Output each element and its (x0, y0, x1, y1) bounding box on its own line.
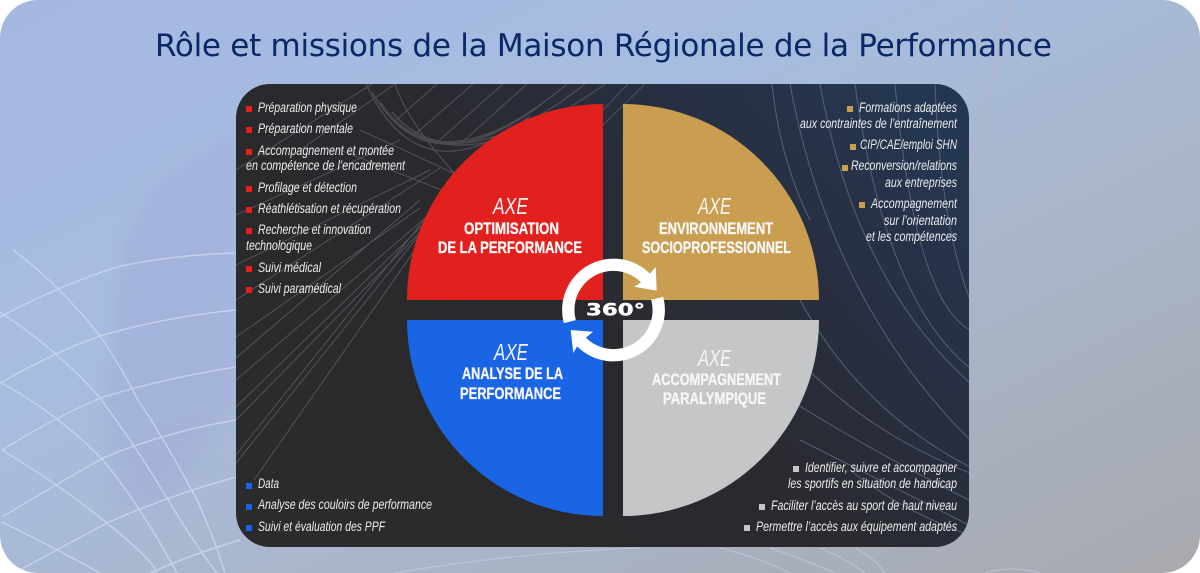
quadrant: optimisation de la performance: DE LA PERFORMANCE (438, 239, 582, 257)
dark central panel (236, 84, 970, 547)
list: optimisation de la performance: Accompagnement et montée (257, 143, 394, 158)
list: accompagnement paralympique: Permettre l’accès aux équipement adaptés (756, 519, 957, 534)
list: accompagnement paralympique: Identifier, suivre et accompagner (805, 460, 957, 475)
quadrant: optimisation de la performance: OPTIMISATION (464, 220, 559, 238)
quadrant: accompagnement paralympique: AXE (697, 345, 731, 371)
list: analyse de la performance: Suivi et évaluation des PPF (258, 519, 386, 534)
list: optimisation de la performance: technologique (246, 238, 312, 253)
list: environnement socioprofessionnel: aux contraintes de l’entraînement (800, 116, 958, 131)
quadrant: accompagnement paralympique: ACCOMPAGNEMENT (652, 371, 781, 389)
list: optimisation de la performance: Recherche et innovation (258, 222, 371, 237)
quadrant: environnement socioprofessionnel: AXE (697, 193, 731, 219)
quadrant: accompagnement paralympique (623, 320, 819, 516)
list: environnement socioprofessionnel: et les compétences (866, 229, 957, 244)
list: optimisation de la performance: Réathlétisation et récupération (258, 201, 401, 216)
quadrant: environnement socioprofessionnel: ENVIRONNEMENT (659, 220, 773, 238)
list: analyse de la performance: Analyse des couloirs de performance (257, 497, 432, 512)
list: optimisation de la performance: Préparation physique (258, 100, 357, 115)
list: optimisation de la performance: Préparation mentale (258, 121, 353, 136)
list: environnement socioprofessionnel: Formations adaptées (859, 100, 957, 115)
quadrant: accompagnement paralympique: PARALYMPIQUE (663, 390, 766, 408)
list: environnement socioprofessionnel: CIP/CAE/emploi SHN (860, 137, 957, 152)
quadrant: optimisation de la performance: AXE (491, 193, 528, 219)
title: Rôle et missions de la Maison Régionale de la Performance (155, 28, 1052, 64)
quadrant: analyse de la performance: AXE (493, 339, 528, 365)
list: analyse de la performance: Data (258, 476, 279, 491)
list: environnement socioprofessionnel (800, 100, 958, 244)
quadrant: optimisation de la performance (407, 104, 603, 300)
list: accompagnement paralympique: les sportifs en situation de handicap (788, 476, 957, 491)
list: optimisation de la performance: Suivi paramédical (258, 281, 342, 296)
quadrant: analyse de la performance (407, 320, 603, 516)
quadrant: analyse de la performance: PERFORMANCE (460, 385, 561, 403)
list: accompagnement paralympique: Faciliter l’accès au sport de haut niveau (771, 498, 957, 513)
list: optimisation de la performance: Suivi médical (258, 260, 322, 275)
quadrant: environnement socioprofessionnel (623, 104, 819, 300)
quadrant: environnement socioprofessionnel: SOCIOPROFESSIONNEL (642, 239, 791, 257)
list: optimisation de la performance (246, 100, 406, 296)
icon: 360 degree cycle arrows (562, 259, 665, 361)
list: environnement socioprofessionnel: sur l’orientation (884, 213, 957, 228)
icon: 360 degree cycle arrows: 360° (586, 300, 645, 320)
list: optimisation de la performance: en compétence de l’encadrement (246, 158, 406, 173)
quadrant: analyse de la performance: ANALYSE DE LA (462, 365, 563, 383)
list: accompagnement paralympique (744, 460, 957, 534)
list: optimisation de la performance: Profilage et détection (258, 180, 357, 195)
list: environnement socioprofessionnel: Reconversion/relations (851, 158, 957, 173)
list: analyse de la performance (246, 476, 432, 534)
list: environnement socioprofessionnel: Accompagnement (870, 196, 958, 211)
list: environnement socioprofessionnel: aux entreprises (885, 175, 957, 190)
